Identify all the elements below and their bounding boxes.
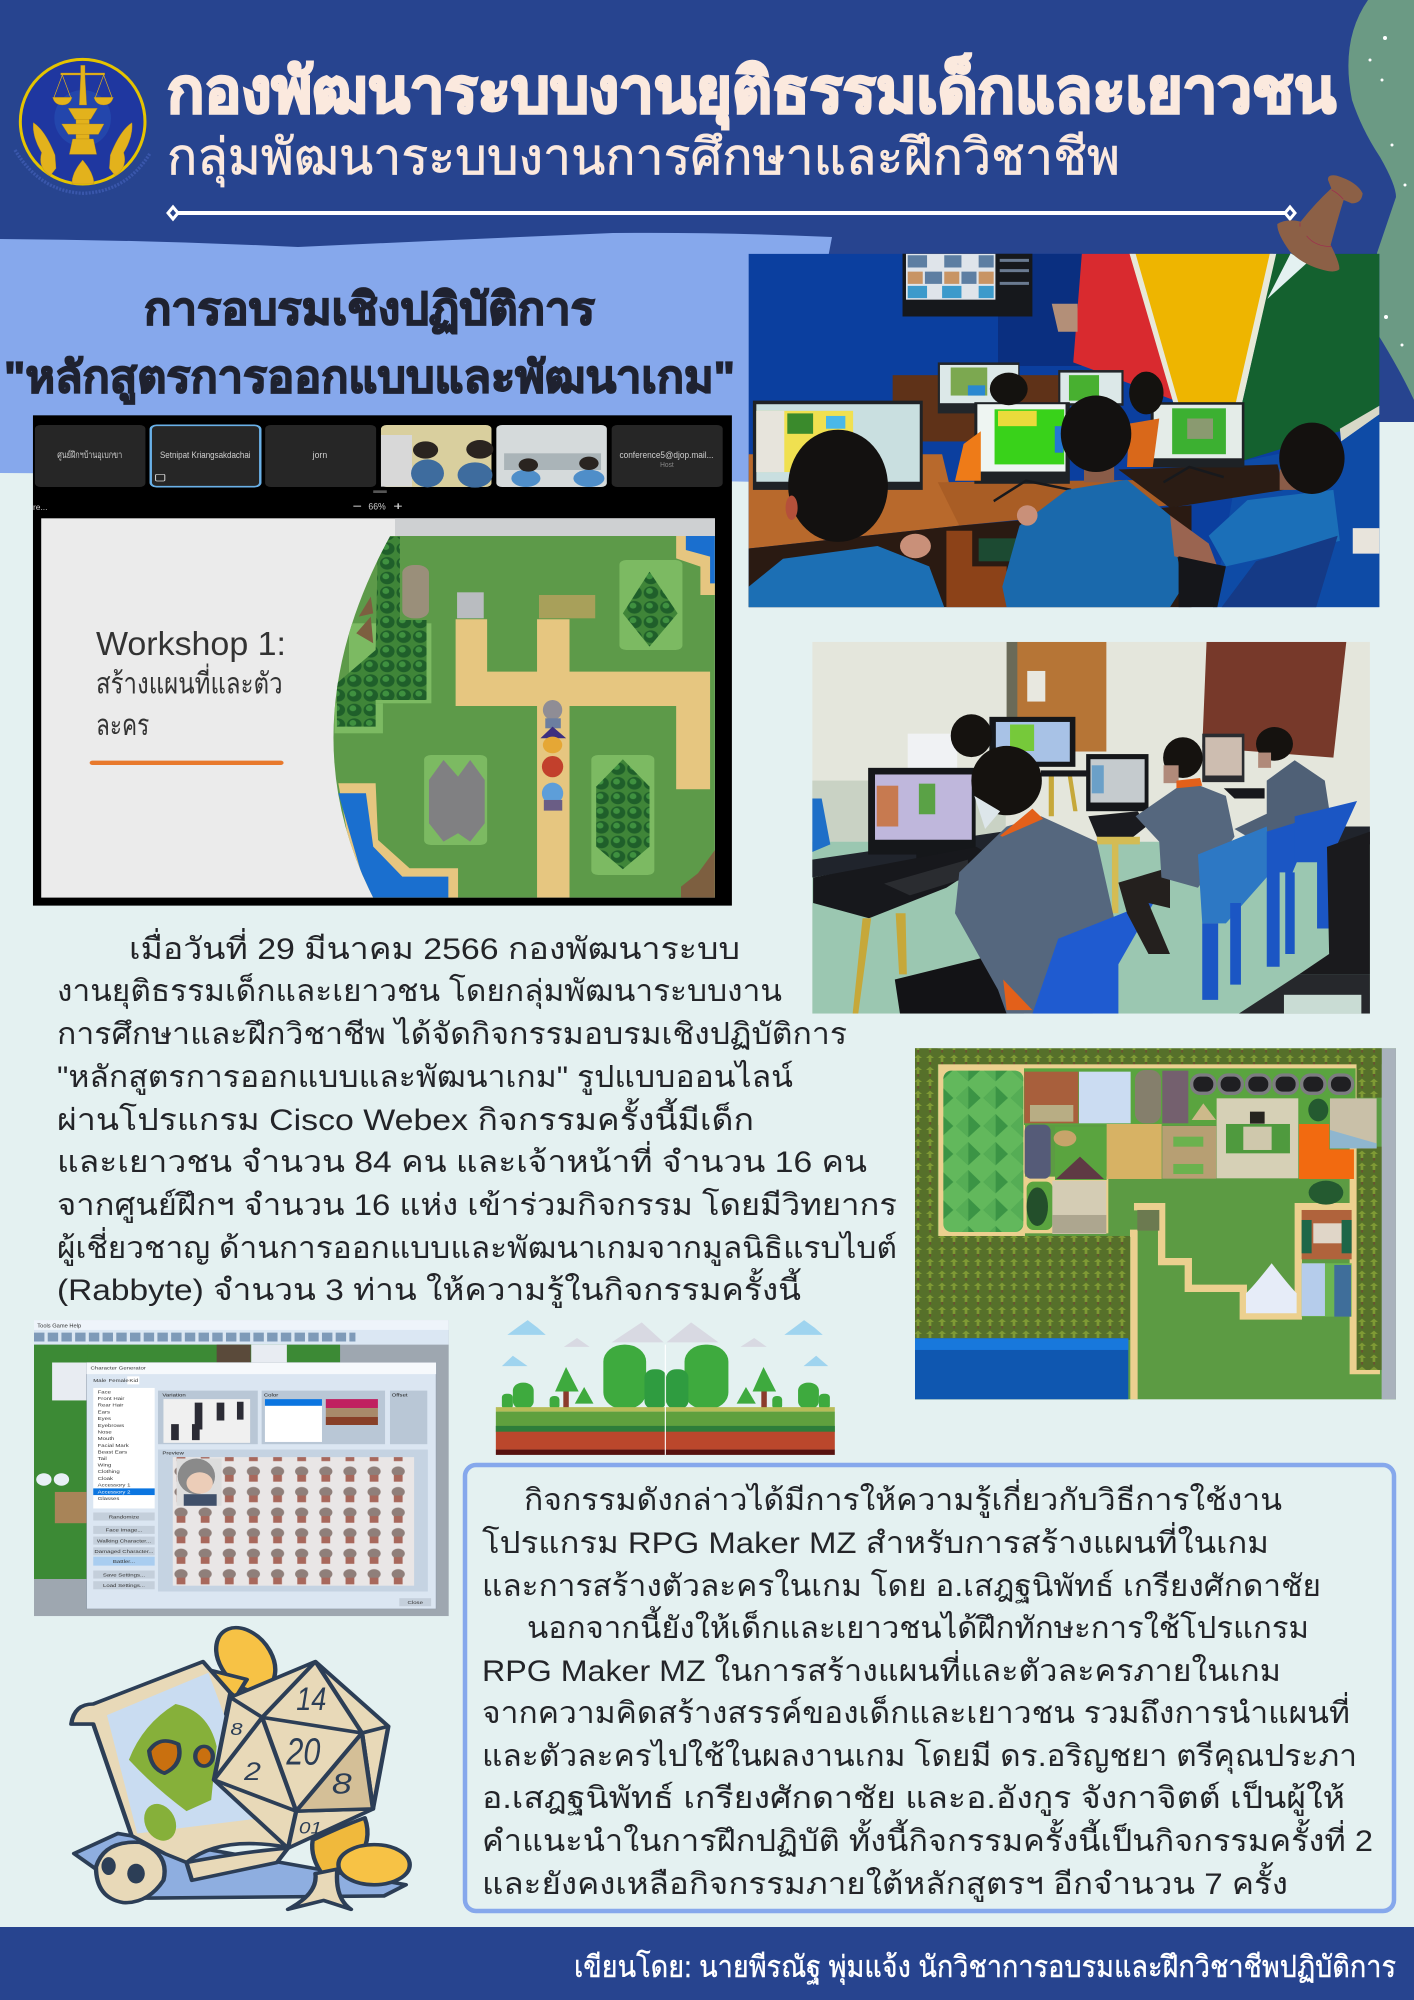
slide title: [96, 625, 286, 741]
part list: Clothing: [98, 1470, 120, 1475]
activity text: และการสร้างตัวละครในเกม โดย อ.เสฎฐนิพัทธ์ เกรียงศักดาชัย: [482, 1568, 1321, 1604]
intro paragraph: การศึกษาและฝึกวิชาชีพ ได้จัดกิจกรรมอบรมเชิงปฏิบัติการ: [57, 1016, 847, 1051]
part list: Wing: [98, 1463, 111, 1468]
green land: [129, 1704, 217, 1811]
tile names: Host: [660, 461, 674, 469]
intro paragraph: [57, 928, 897, 1308]
photo: training room with grey uniforms: [812, 642, 1370, 1014]
slide: [41, 518, 717, 899]
map image: RPG world map: [915, 1048, 1396, 1399]
part list: Cloak: [98, 1476, 113, 1482]
tabs: Kid: [129, 1379, 138, 1384]
variation panel: Variation: [162, 1393, 186, 1398]
activity text: อ.เสฎฐนิพัทธ์ เกรียงศักดาชัย และอ.อังกูร จังกาจิตต์ เป็นผู้ให้: [482, 1779, 1345, 1816]
lava: [1299, 1124, 1354, 1179]
pale clouds: [564, 1322, 767, 1347]
sand hut: [1192, 1103, 1216, 1120]
part list: Eyebrows: [98, 1423, 124, 1429]
tabs: Male: [93, 1379, 106, 1384]
offset panel: Offset: [392, 1393, 408, 1398]
tabs: [93, 1376, 139, 1384]
map behind dialog: [34, 1345, 340, 1579]
tech tower: [1025, 1125, 1051, 1179]
dice numbers: [230, 1680, 352, 1838]
wall sockets: [1052, 304, 1078, 332]
trunks: [563, 1392, 767, 1408]
intro paragraph: ผู้เชี่ยวชาญ ด้านการออกแบบและพัฒนาเกมจากมูลนิธิแรบไบต์: [57, 1227, 897, 1266]
intro paragraph: ผ่านโปรแกรม Cisco Webex กิจกรรมครั้งนี้มีเด็ก: [57, 1098, 754, 1137]
button labels: Damaged Character...: [94, 1550, 154, 1555]
part list: Glasses: [98, 1496, 120, 1502]
heading line 2: "หลักสูตรการออกแบบและพัฒนาเกม": [4, 353, 735, 404]
castles: [1024, 1070, 1188, 1123]
modern building and pines: [1299, 1098, 1377, 1148]
blue cloth: [812, 798, 830, 852]
desert and villages: [1107, 1124, 1216, 1179]
orange lakes: [149, 1741, 179, 1773]
header background: [0, 0, 1414, 422]
red palace: [1302, 1210, 1352, 1259]
header rule: [168, 207, 1295, 219]
student right: [1170, 423, 1345, 607]
dice numbers: 20: [286, 1731, 321, 1773]
map scroll: [71, 1662, 285, 1862]
green blob: [1348, 0, 1414, 400]
slide title: ละคร: [96, 709, 149, 741]
button labels: Face Image...: [106, 1528, 143, 1533]
island: [139, 1801, 181, 1844]
part list: Front Hair: [98, 1396, 125, 1402]
tile names: [57, 449, 713, 469]
dice numbers: 14: [296, 1680, 326, 1717]
intro paragraph: จากศูนย์ฝึกฯ จำนวน 16 แห่ง เข้าร่วมกิจกรรม โดยมีวิทยากร: [57, 1187, 897, 1223]
coin behind dice: [211, 1671, 247, 1697]
tile names: jorn: [312, 450, 327, 460]
pines right: [1309, 1181, 1343, 1205]
colour panel: Color: [264, 1393, 278, 1398]
button labels: Close: [408, 1600, 423, 1606]
sea: [915, 1338, 1128, 1399]
logo caption: [15, 150, 150, 193]
rocks: [429, 760, 485, 842]
monitors: [868, 717, 1244, 872]
monitor bottom right: [1239, 832, 1370, 1014]
illustration: map, d20 dice, skull and coins: [71, 1620, 410, 1909]
tower: [402, 565, 429, 618]
button labels: Randomize: [109, 1515, 139, 1520]
toolbar icons: [34, 1327, 355, 1347]
part list: Ears: [98, 1410, 110, 1415]
part list: Eyes: [98, 1417, 111, 1422]
notice door: [1017, 642, 1106, 752]
coins: [338, 1845, 410, 1885]
map sheet: [107, 1673, 263, 1833]
intro paragraph: เมื่อวันที่ 29 มีนาคม 2566 กองพัฒนาระบบ: [129, 928, 740, 966]
green hills: [943, 1071, 1023, 1232]
slide title: สร้างแผนที่และตัว: [96, 663, 283, 700]
village: [539, 595, 595, 618]
activity text: [482, 1479, 1373, 1902]
activity text: RPG Maker MZ ในการสร้างแผนที่และตัวละครภายในเกม: [482, 1650, 1281, 1688]
activity text: คำแนะนำในการฝึกปฏิบัติ ทั้งนี้กิจกรรมครั้งนี้เป็นกิจกรรมครั้งที่ 2: [482, 1819, 1373, 1858]
tabs: Female: [109, 1379, 129, 1384]
part list: Nose: [98, 1430, 112, 1435]
party characters: [540, 700, 566, 811]
part list: Mouth: [98, 1437, 114, 1442]
dialog title: Character Generator: [91, 1366, 146, 1371]
dice numbers: 2: [243, 1758, 261, 1785]
yellow claw: [312, 1818, 367, 1876]
monitors: [753, 362, 1244, 490]
heading line 1: การอบรมเชิงปฏิบัติการ: [144, 285, 595, 334]
button labels: Walking Character...: [97, 1539, 152, 1544]
sand roads: [938, 1062, 1380, 1399]
offset panel: [390, 1391, 427, 1444]
tile names: ศูนย์ฝึกฯบ้านอุเบกขา: [57, 449, 122, 461]
preview: Preview: [162, 1451, 184, 1456]
monitor stands: [994, 467, 1224, 501]
colour panel: [262, 1391, 385, 1444]
button labels: Battler...: [113, 1559, 136, 1565]
student back left: [951, 714, 992, 757]
preview: [158, 1450, 428, 1591]
student front: [895, 746, 1114, 1014]
part list: Accessory 1: [98, 1483, 131, 1488]
buttons: [93, 1512, 431, 1606]
temple: [457, 592, 484, 618]
title: กองพัฒนาระบบงานยุติธรรมเด็กและเยาวชน: [167, 53, 1336, 129]
zoom controls: re...: [33, 503, 48, 512]
desks: [813, 770, 1265, 1014]
ground: [496, 1345, 835, 1455]
intro paragraph: "หลักสูตรการออกแบบและพัฒนาเกม" รูปแบบออนไลน์: [57, 1059, 793, 1095]
button labels: [94, 1515, 423, 1606]
tile names: Setnipat Kriangsakdachai: [160, 450, 251, 460]
intro paragraph: (Rabbyte) จำนวน 3 ท่าน ให้ความรู้ในกิจกรรมครั้งนี้: [57, 1268, 801, 1308]
participant tiles: [35, 425, 723, 493]
light blue title band: [0, 233, 832, 483]
forests: [337, 537, 678, 869]
intro paragraph: งานยุติธรรมเด็กและเยาวชน โดยกลุ่มพัฒนาระบบงาน: [57, 972, 782, 1010]
activity text: โปรแกรม RPG Maker MZ สำหรับการสร้างแผนที่ในเกม: [482, 1522, 1269, 1560]
clouds: [502, 1320, 828, 1366]
walled town and pines: [1027, 1181, 1106, 1234]
screenshot: online meeting with workshop slide: [33, 415, 732, 906]
blue mat: [74, 1833, 406, 1898]
dice numbers: 8: [332, 1767, 352, 1800]
fortress: [1217, 1098, 1298, 1178]
logo: [15, 59, 150, 193]
button labels: Load Settings...: [103, 1583, 145, 1589]
snow mountain: [1246, 1263, 1297, 1313]
tile names: conference5@djop.mail...: [619, 450, 713, 460]
workshop heading: [4, 285, 735, 404]
slide title: Workshop 1:: [96, 625, 286, 662]
pixel art landscape: [496, 1320, 835, 1455]
part list: Accessory 2: [98, 1490, 131, 1495]
part list: Rear Hair: [98, 1403, 124, 1408]
zoom controls: 66%: [368, 501, 386, 512]
screenshot: character generator: [34, 1320, 449, 1616]
coin back: [204, 1620, 287, 1699]
blue chair front: [1032, 900, 1155, 1014]
dice numbers: 8: [230, 1720, 243, 1740]
footer bar: [0, 1927, 1414, 2000]
window shutter: [1202, 642, 1346, 758]
part list: Beast Ears: [98, 1450, 127, 1455]
water: [338, 783, 458, 898]
part list: Face: [98, 1390, 111, 1395]
d20 dice: [214, 1662, 388, 1848]
dice numbers: 01: [299, 1819, 322, 1838]
blue towers: [1302, 1263, 1351, 1317]
subtitle: กลุ่มพัฒนาระบบงานการศึกษาและฝึกวิชาชีพ: [167, 129, 1120, 187]
blue chairs: [1198, 801, 1357, 1000]
slide map: [315, 536, 717, 899]
volcano: [1054, 1130, 1104, 1179]
zoom controls: [33, 501, 402, 512]
generator dialog: [87, 1362, 436, 1609]
activity text: และตัวละครไปใช้ในผลงานเกม โดยมี ดร.อริญชยา ตรีคุณประภา: [482, 1738, 1357, 1775]
menu: Tools Game Help: [37, 1324, 82, 1329]
part list: [93, 1388, 155, 1508]
trees: [502, 1345, 830, 1409]
skull: [96, 1842, 288, 1903]
grass clearings: [334, 560, 682, 875]
student right: [1234, 727, 1329, 836]
button labels: Save Settings...: [103, 1573, 146, 1578]
activity text: กิจกรรมดังกล่าวได้มีการให้ความรู้เกี่ยวกับวิธีการใช้งาน: [524, 1479, 1282, 1518]
small lake: [195, 1746, 213, 1766]
back students: [955, 372, 1164, 481]
orange underline: [90, 761, 284, 765]
part list: Facial Mark: [98, 1443, 129, 1449]
pushpin: [1267, 175, 1363, 299]
palm borders: [915, 1048, 1382, 1370]
intro paragraph: และเยาวชน จำนวน 84 คน และเจ้าหน้าที่ จำนวน 16 คน: [57, 1141, 867, 1179]
logo seal: [20, 59, 145, 184]
tv on wall: [903, 250, 1032, 316]
activity text: นอกจากนี้ยังให้เด็กและเยาวชนได้ฝึกทักษะการใช้โปรแกรม: [527, 1606, 1309, 1645]
student middle: [1118, 737, 1234, 954]
activity text: และยังคงเหลือกิจกรรมภายใต้หลักสูตรฯ อีกจำนวน 7 ครั้ง: [482, 1862, 1288, 1902]
activity text box: [465, 1465, 1394, 1911]
photo: classroom with coloured wall: [749, 250, 1379, 607]
caves: [1192, 1075, 1353, 1093]
bone tail: [288, 1869, 351, 1909]
activity text: จากความคิดสร้างสรรค์ของเด็กและเยาวชน รวมถึงการนำแผนที่: [482, 1692, 1350, 1730]
student middle: [1002, 396, 1183, 607]
student left: [749, 430, 944, 607]
part list: Tail: [98, 1456, 107, 1462]
variation panel: [158, 1391, 258, 1444]
road: [456, 619, 710, 898]
